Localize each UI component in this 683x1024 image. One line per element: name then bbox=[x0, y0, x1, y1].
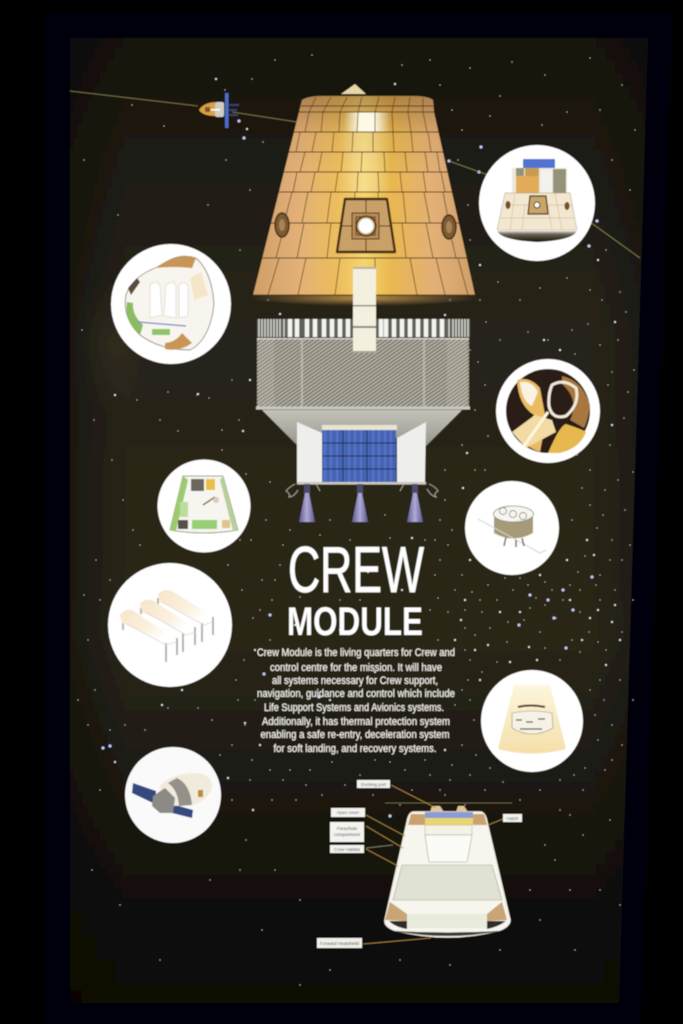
label: Parachute compartment bbox=[330, 822, 364, 842]
description text block: enabling a safe re-entry, deceleration system bbox=[260, 729, 450, 741]
label: Forward Heatshield bbox=[317, 938, 362, 948]
label: Hatch bbox=[503, 814, 522, 822]
circle: capsule exterior bbox=[479, 145, 595, 261]
description text block: Life Support Systems and Avionics systems. bbox=[264, 702, 444, 714]
left white panel bbox=[297, 422, 322, 482]
mesh service module body bbox=[256, 338, 470, 410]
icon: small spacecraft on orbit bbox=[199, 93, 239, 128]
description text block bbox=[257, 647, 455, 755]
circle: cabin interior bbox=[111, 244, 231, 364]
description text block: navigation, guidance and control which include bbox=[257, 688, 455, 700]
label: Apex cover bbox=[331, 808, 365, 817]
label: Docking port: Docking port bbox=[361, 782, 387, 787]
base plate bbox=[297, 482, 426, 484]
hot highlight bbox=[340, 112, 390, 192]
cross-section capsule bbox=[385, 803, 512, 937]
side port right bbox=[442, 215, 456, 239]
central white strip bbox=[353, 267, 376, 353]
label: Hatch: Hatch bbox=[507, 816, 519, 821]
circle: orbital module with solar wings bbox=[125, 747, 221, 843]
radiator stripe band bbox=[257, 319, 470, 337]
title bbox=[287, 533, 424, 644]
description text block: for soft landing, and recovery systems. bbox=[274, 743, 436, 755]
description text block: all systems necessary for Crew support, bbox=[272, 675, 438, 687]
hull tile lines bbox=[253, 97, 475, 295]
leader lines bbox=[363, 785, 503, 944]
label: Parachute compartment: compartment bbox=[334, 832, 361, 837]
label: Apex cover: Apex cover bbox=[337, 810, 360, 815]
orbit path line bbox=[70, 91, 640, 258]
label: Crew Habitat bbox=[330, 845, 364, 853]
engine nozzle left bbox=[299, 484, 315, 522]
description text block: Additionally, it has thermal protection system bbox=[262, 716, 450, 728]
title: MODULE: MODULE bbox=[287, 600, 423, 644]
hatch window bbox=[337, 199, 395, 252]
main crew capsule illustration bbox=[249, 84, 479, 522]
thruster pipes bbox=[286, 484, 438, 497]
right white panel bbox=[397, 422, 426, 482]
circle: astronauts bbox=[496, 359, 600, 463]
star field panel bbox=[70, 38, 648, 1003]
blue solar panel bbox=[322, 430, 396, 482]
label: Forward Heatshield: Forward Heatshield bbox=[320, 941, 359, 946]
hull shading bbox=[253, 96, 475, 295]
conical adapter bbox=[262, 410, 462, 446]
label: Parachute compartment: Parachute bbox=[337, 826, 358, 831]
circle: cabin cutaway bbox=[158, 460, 250, 552]
label: Docking port bbox=[357, 780, 390, 788]
labelled capsule cross-section diagram bbox=[317, 780, 522, 948]
title: CREW: CREW bbox=[288, 533, 424, 606]
side port left bbox=[275, 213, 289, 237]
engine nozzle centre bbox=[352, 484, 368, 522]
capsule glow under hull bbox=[249, 290, 479, 306]
circle: crew module deck bbox=[465, 481, 559, 575]
nose cone bbox=[341, 84, 366, 94]
circle: translucent cone with crew bbox=[481, 670, 583, 772]
top cream bar bbox=[322, 425, 397, 430]
capsule hull bbox=[253, 96, 475, 295]
description text block: control centre for the mission. It will have bbox=[270, 662, 442, 674]
label: Crew Habitat: Crew Habitat bbox=[334, 847, 361, 852]
engine nozzle right bbox=[407, 484, 423, 522]
circle: crew couches bbox=[108, 563, 232, 687]
description text block: Crew Module is the living quarters for Crew and bbox=[257, 647, 455, 659]
